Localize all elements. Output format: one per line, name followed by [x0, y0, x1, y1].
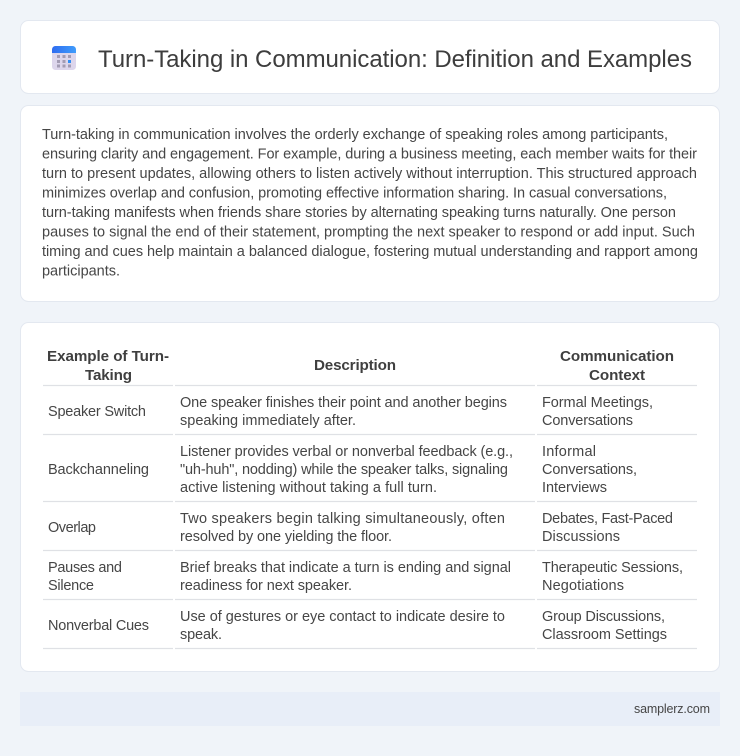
row: speaker switch: Conversations: [542, 413, 633, 429]
table header: [43, 348, 697, 386]
row: overlap: Two speakers begin talking simultaneously, often: [180, 511, 505, 527]
row: backchanneling: [43, 444, 697, 502]
table header: Example of Turn-: [47, 348, 169, 365]
row: backchanneling: Informal: [542, 444, 596, 460]
footer source text: samplerz.com: [634, 702, 710, 716]
panel: introduction text: [20, 106, 720, 302]
row: pauses and silence: Brief breaks that indicate a turn is ending and signal: [180, 560, 511, 576]
row: speaker switch: One speaker finishes their point and another begins: [180, 395, 507, 411]
row: speaker switch: Speaker Switch: [48, 404, 146, 420]
row: backchanneling: active listening without taking a full turn.: [180, 480, 437, 496]
table header: Communication: [560, 348, 674, 365]
row: pauses and silence: Pauses and: [48, 560, 122, 576]
table header: Taking: [85, 367, 132, 384]
row: backchanneling: Backchanneling: [48, 462, 149, 478]
title: Turn-Taking in Communication: Definition and Examples: [98, 46, 692, 73]
row: nonverbal cues: Nonverbal Cues: [48, 618, 149, 634]
paragraph: turn-taking manifests when friends share stories by alternating speaking turns naturally. One person: [42, 205, 676, 221]
row: backchanneling: Listener provides verbal or nonverbal feedback (e.g.,: [180, 444, 513, 460]
icon: calendar grid: [52, 46, 76, 70]
paragraph: ensuring clarity and engagement. For example, during a business meeting, each member waits for their: [42, 146, 697, 162]
row: nonverbal cues: Use of gestures or eye contact to indicate desire to: [180, 609, 505, 625]
table header: Description: [314, 357, 396, 374]
paragraph: minimizes overlap and confusion, promoting effective information sharing. In casual conversations,: [42, 186, 667, 202]
paragraph: turn to present updates, allowing others to listen actively without interruption. This structured approach: [42, 166, 697, 182]
panel: examples table: [20, 322, 720, 672]
row: pauses and silence: Negotiations: [542, 578, 624, 594]
paragraph: pauses to signal the end of their statement, prompting the next speaker to respond or add input. Such: [42, 224, 695, 240]
row: nonverbal cues: speak.: [180, 627, 222, 643]
row: nonverbal cues: Classroom Settings: [542, 627, 667, 643]
footer bar: [20, 692, 720, 726]
row: backchanneling: "uh-huh", nodding) while the speaker talks, signaling: [180, 462, 508, 478]
row: overlap: Debates, Fast-Paced: [542, 511, 673, 527]
row: backchanneling: Conversations,: [542, 462, 637, 478]
row: nonverbal cues: Group Discussions,: [542, 609, 665, 625]
row: overlap: Overlap: [48, 520, 96, 536]
row: overlap: Discussions: [542, 529, 620, 545]
paragraph: timing and cues help maintain a balanced dialogue, fostering mutual understanding and rapport among: [42, 244, 698, 260]
row: pauses and silence: Silence: [48, 578, 94, 594]
table header: Context: [589, 367, 645, 384]
paragraph: [42, 127, 698, 280]
paragraph: Turn-taking in communication involves the orderly exchange of speaking roles among participants,: [42, 127, 668, 143]
row: nonverbal cues: [43, 609, 697, 648]
row: speaker switch: speaking immediately after.: [180, 413, 356, 429]
row: overlap: [43, 511, 697, 550]
header panel: [20, 20, 720, 94]
row: pauses and silence: [43, 560, 697, 600]
row: speaker switch: Formal Meetings,: [542, 395, 653, 411]
row: backchanneling: Interviews: [542, 480, 607, 496]
row: speaker switch: [43, 395, 697, 434]
row: pauses and silence: readiness for next speaker.: [180, 578, 352, 594]
row: pauses and silence: Therapeutic Sessions,: [542, 560, 683, 576]
row: overlap: resolved by one yielding the floor.: [180, 529, 392, 545]
paragraph: participants.: [42, 264, 120, 280]
